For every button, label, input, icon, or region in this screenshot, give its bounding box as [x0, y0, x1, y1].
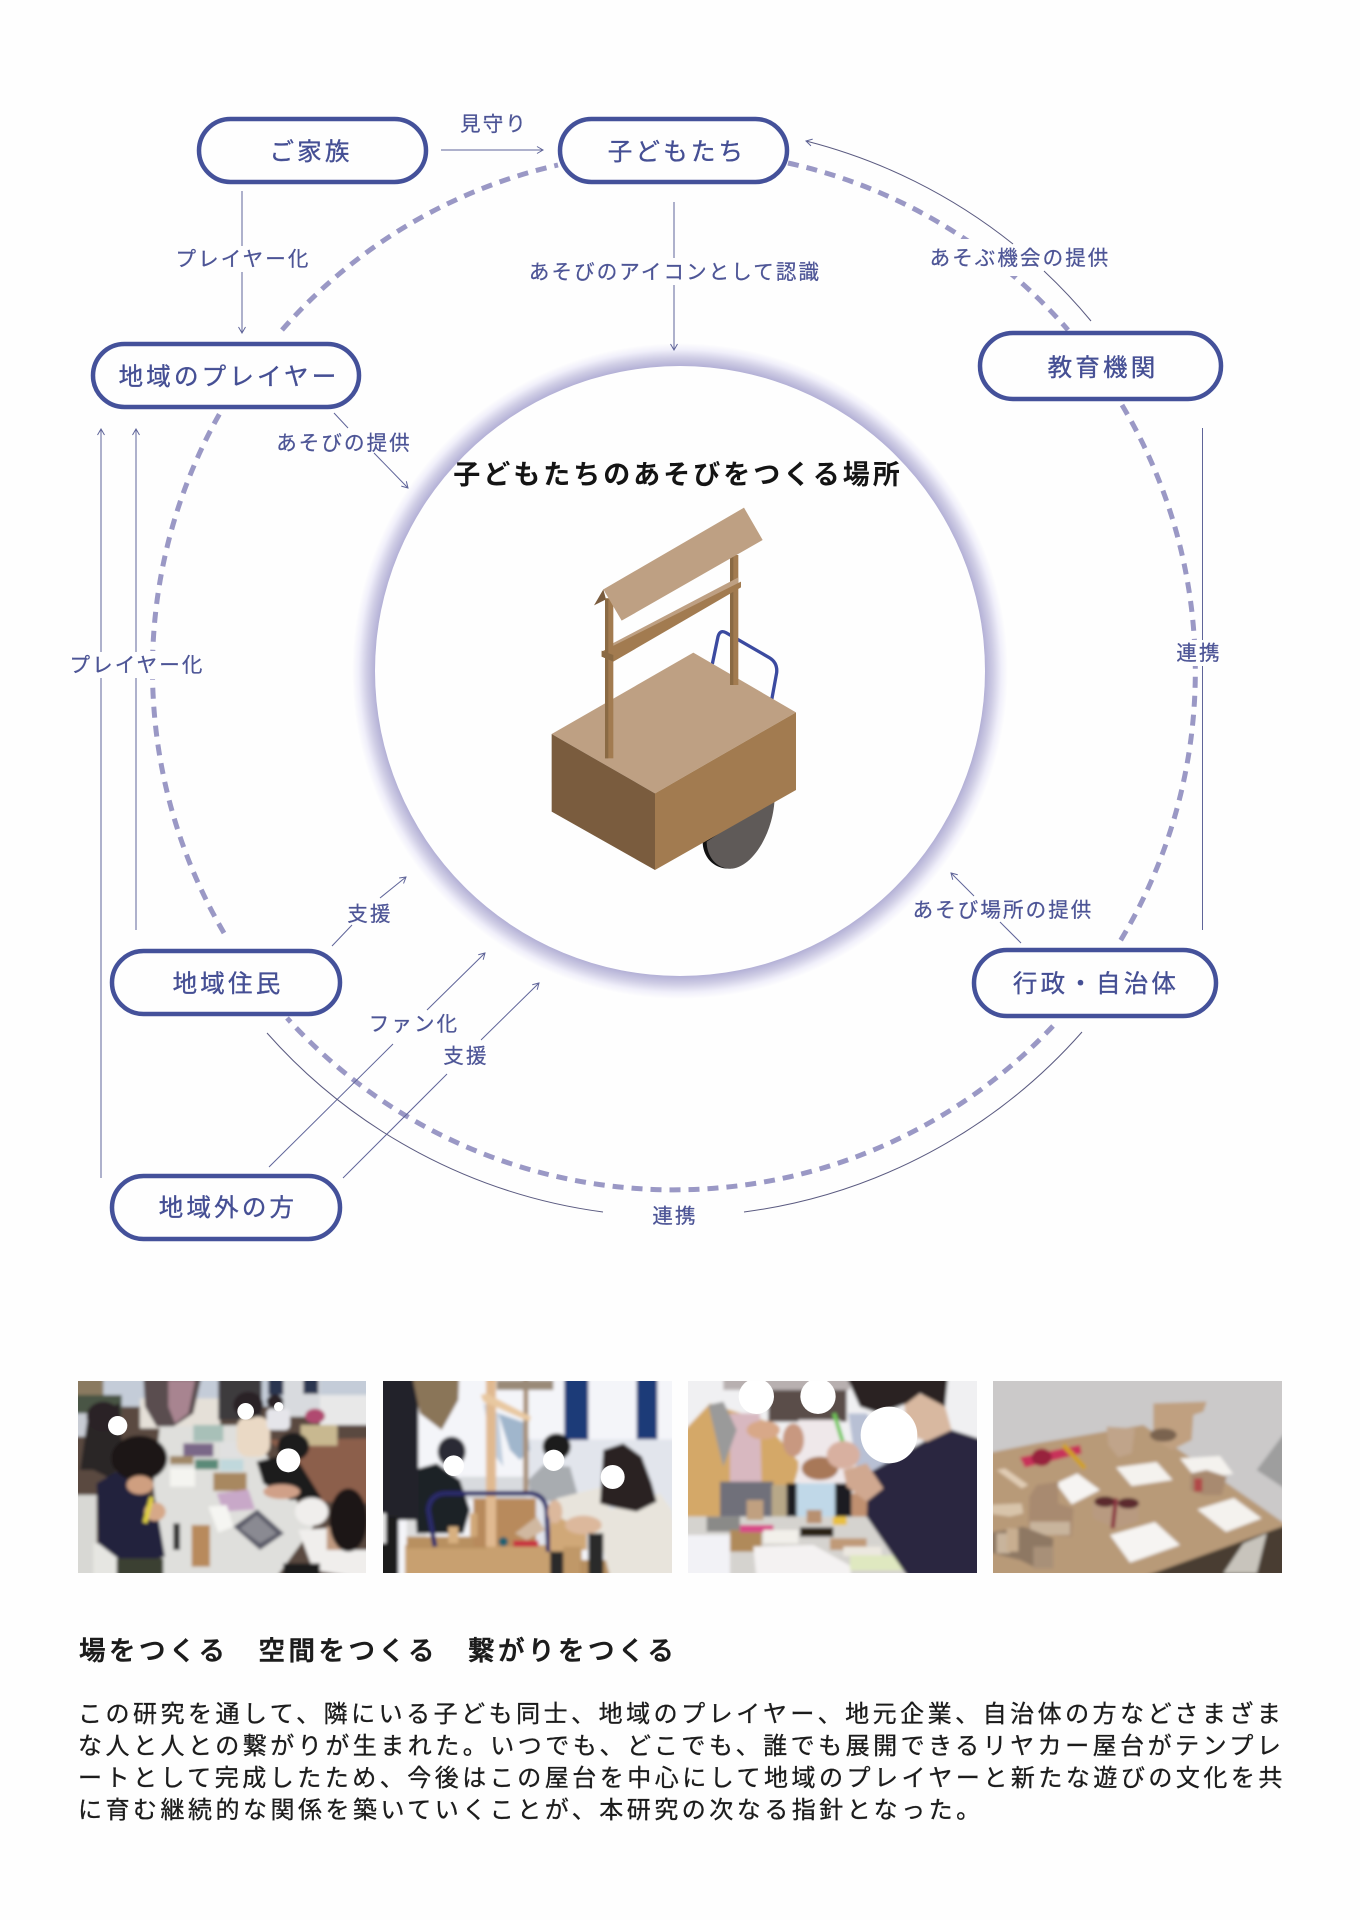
- arrows: プレイヤー化 left side: プレイヤー化: [70, 654, 204, 677]
- heading: 場をつくる 空間をつくる 繋がりをつくる: 場をつくる 空間をつくる 繋がりをつくる: [79, 1636, 677, 1666]
- node: 地域のプレイヤー: 地域のプレイヤー: [119, 363, 339, 391]
- node: 行政・自治体: 行政・自治体: [1013, 970, 1179, 998]
- arrow: 支援 from 地域外の方: [343, 983, 539, 1178]
- arrow: ご家族 to 地域のプレイヤー: プレイヤー化: [176, 248, 310, 271]
- node: 地域外の方: [112, 1176, 340, 1239]
- arrow: 支援 from 地域住民: [332, 877, 406, 946]
- body text: ートとして完成したため、今後はこの屋台を中心にして地域のプレイヤーと新たな遊びの文化を共: [78, 1765, 1286, 1792]
- arrows: プレイヤー化 left side: [68, 429, 206, 1178]
- arrow: あそび場所の提供: あそび場所の提供: [913, 899, 1093, 922]
- icon: wooden cart: [552, 508, 796, 870]
- arrow: あそび場所の提供: [913, 873, 1093, 943]
- body text: この研究を通して、隣にいる子ども同士、地域のプレイヤー、地元企業、自治体の方などさまざま: [78, 1700, 1284, 1728]
- photo: children crafting at a table: [78, 1381, 366, 1573]
- arrow: 支援 from 地域住民: 支援: [347, 903, 393, 926]
- central circle with glow: [352, 343, 1008, 999]
- arrow: 子どもたち to center: あそびのアイコンとして認識: [529, 261, 821, 284]
- node: 地域住民: 地域住民: [173, 970, 283, 998]
- body text: な人と人との繋がりが生まれた。いつでも、どこでも、誰でも展開できるリヤカー屋台がテンプレ: [78, 1733, 1284, 1760]
- node: 教育機関: [980, 333, 1221, 399]
- line: 連携 bottom arc: 連携: [652, 1205, 698, 1228]
- node: 地域のプレイヤー: [93, 344, 359, 407]
- line: 連携 right side: [1173, 428, 1223, 930]
- arrow: あそびの提供: あそびの提供: [276, 432, 412, 455]
- dashed relationship ring: [152, 163, 1195, 1190]
- arrow: あそぶ機会の提供: あそぶ機会の提供: [930, 247, 1110, 270]
- arrow: 見守り: [441, 113, 543, 150]
- node: ご家族: [199, 119, 426, 182]
- node: 子どもたち: 子どもたち: [608, 139, 746, 166]
- infographic page: [72, 114, 1282, 1821]
- photo: workshop at the cart: [383, 1381, 672, 1573]
- node: 地域外の方: 地域外の方: [159, 1194, 297, 1222]
- node: 子どもたち: [560, 119, 787, 182]
- central title: 子どもたちのあそびをつくる場所: [453, 460, 903, 490]
- node: 行政・自治体: [974, 950, 1216, 1016]
- line: 連携 bottom arc: [267, 1032, 1082, 1228]
- line: 連携 right side: 連携: [1176, 642, 1222, 665]
- arrow: あそぶ機会の提供: [806, 141, 1112, 321]
- arrow: 見守り: 見守り: [460, 113, 528, 136]
- photo: wooden works and cards on a table: [993, 1381, 1282, 1573]
- photo: children building with wood pieces: [688, 1381, 977, 1573]
- node: 教育機関: 教育機関: [1048, 354, 1158, 382]
- arrow: あそびの提供: [276, 413, 412, 488]
- arrow: 支援 from 地域外の方: 支援: [443, 1045, 489, 1068]
- body text: [78, 1700, 1286, 1824]
- arrow: ファン化: ファン化: [369, 1013, 459, 1036]
- arrow: ファン化: [269, 953, 485, 1167]
- body text: に育む継続的な関係を築いていくことが、本研究の次なる指針となった。: [78, 1797, 984, 1824]
- node: ご家族: ご家族: [269, 138, 353, 166]
- node: 地域住民: [112, 951, 340, 1014]
